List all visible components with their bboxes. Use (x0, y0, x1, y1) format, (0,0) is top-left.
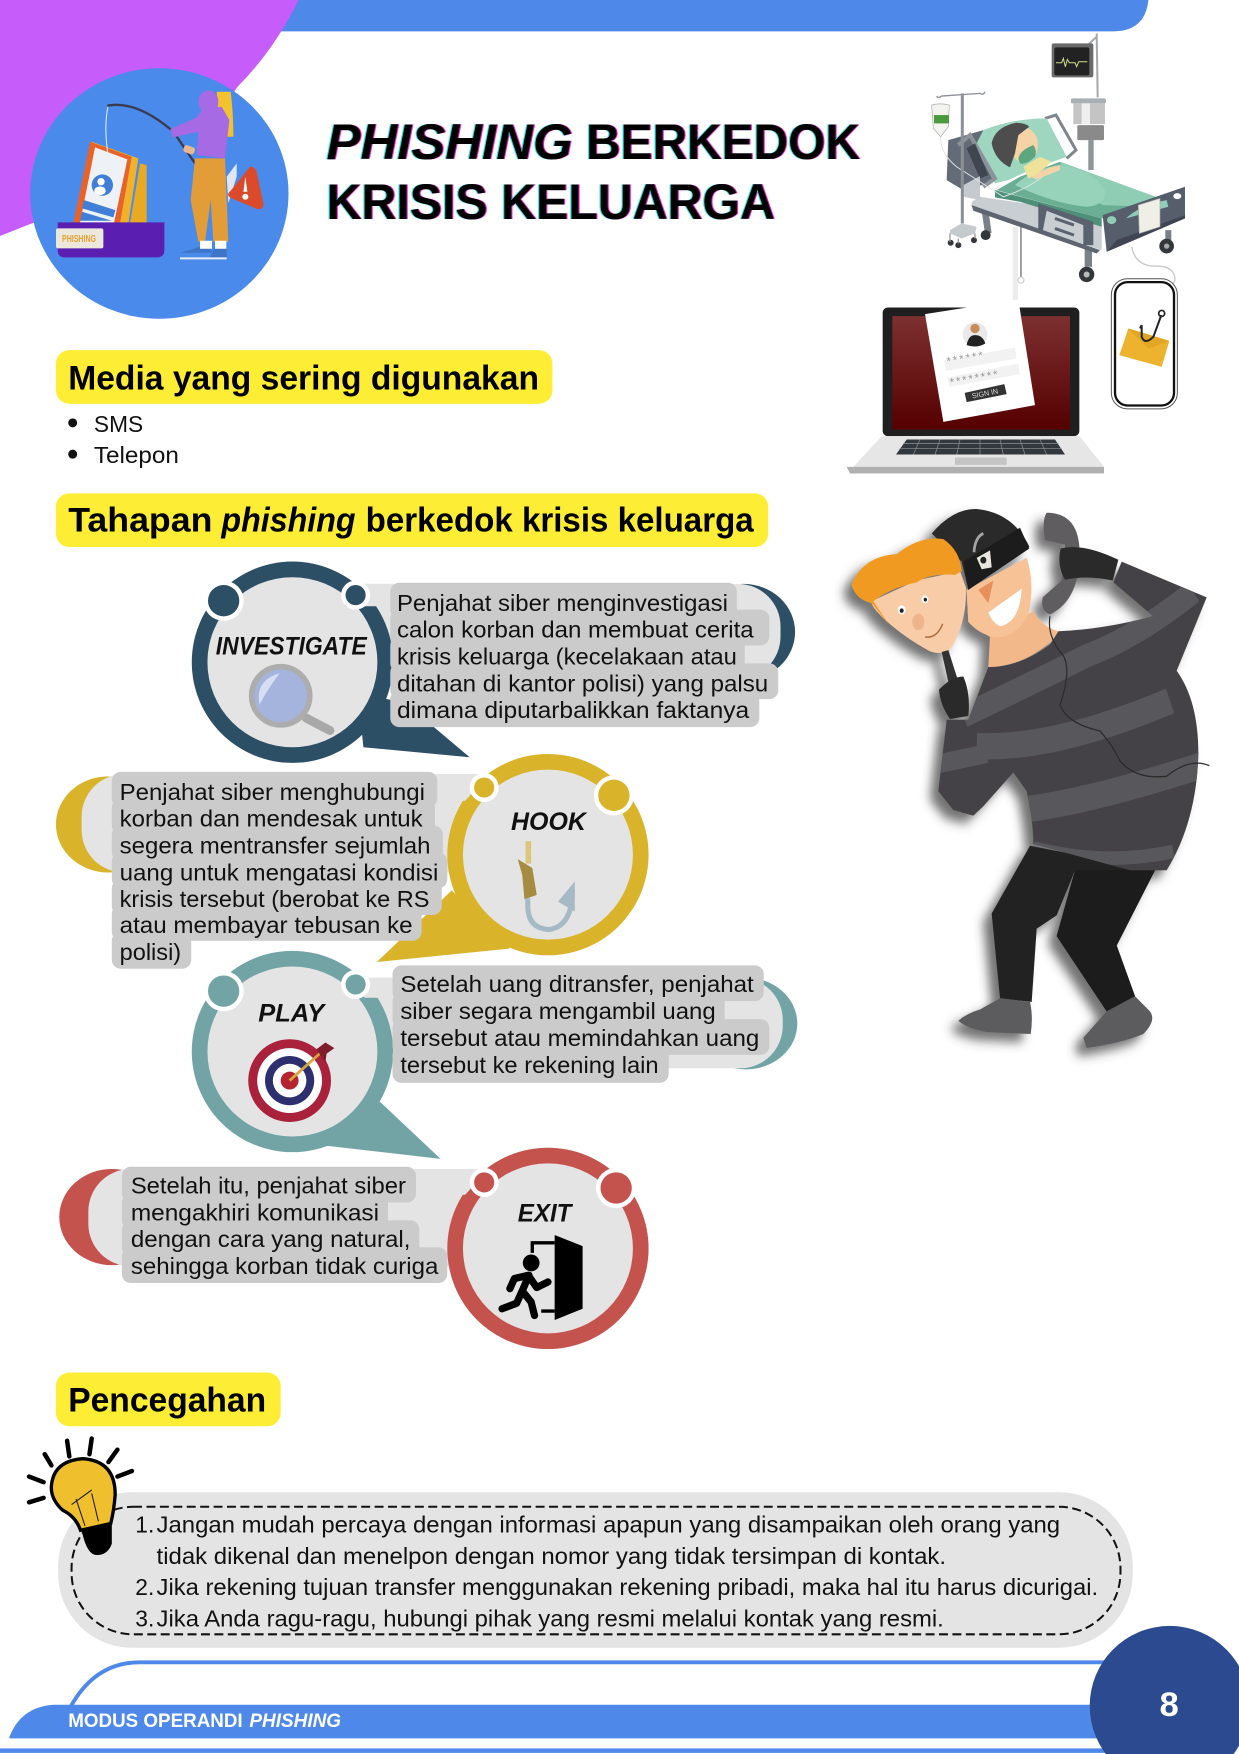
list: media: Telepon (94, 442, 179, 468)
heading: Tahapan phishing: berkedok krisis keluarga (366, 501, 754, 539)
panel: prevention list (58, 1492, 1133, 1648)
text: investigate description: dimana diputarbalikkan faktanya (397, 697, 750, 723)
text: play description: tersebut atau memindahkan uang (400, 1025, 759, 1051)
text: exit description: sehingga korban tidak curiga (131, 1253, 439, 1279)
icon: fishing for account data in blue circle (30, 68, 289, 319)
top blue bar (257, 0, 1148, 31)
illustration: hospital bed, laptop and phone phishing: ****** (946, 350, 985, 368)
step 1: INVESTIGATE (192, 562, 795, 763)
text: investigate description: calon korban dan membuat cerita (397, 617, 755, 643)
panel: prevention list: Jika Anda ragu-ragu, hubungi pihak yang resmi melalui kontak yang resmi. (157, 1605, 944, 1631)
icon: fish hook (518, 841, 575, 930)
icon: fishing for account data in blue circle: PHISHING (62, 234, 96, 245)
panel: prevention list: 2. (135, 1574, 154, 1600)
title: BERKEDOK (586, 113, 860, 170)
label: PLAY: PLAY (258, 1000, 327, 1027)
illustration: thief with mask and phone (852, 509, 1209, 1048)
step 2: HOOK (56, 754, 649, 969)
label: EXIT: EXIT (518, 1201, 573, 1228)
text: hook description: atau membayar tebusan ke (120, 912, 413, 938)
list: media: SMS (94, 411, 143, 437)
text: hook description: krisis tersebut (berobat ke RS (120, 886, 429, 912)
illustration: hospital bed, laptop and phone phishing: ******** (949, 369, 999, 389)
text: exit description (122, 1167, 447, 1283)
text: hook description (112, 772, 447, 969)
heading: Tahapan phishing: phishing (220, 501, 356, 539)
heading: Tahapan phishing (56, 493, 768, 547)
heading: Tahapan phishing: Tahapan (68, 501, 212, 539)
icon: magnifying glass (252, 667, 330, 730)
text: hook description: korban dan mendesak untuk (120, 806, 423, 832)
text: investigate description: krisis keluarga (kecelakaan atau (397, 643, 737, 669)
background: purple corner (0, 0, 299, 236)
panel: prevention list: Jangan mudah percaya dengan informasi apapun yang disampaikan oleh orang yang (157, 1512, 1060, 1538)
text: investigate description: ditahan di kantor polisi) yang palsu (397, 670, 768, 696)
heading: Media yang sering digunakan: Media yang sering digunakan (68, 359, 539, 397)
text: investigate description: Penjahat siber menginvestigasi (397, 590, 728, 616)
icon: target with arrow (248, 1039, 334, 1122)
text: exit description: dengan cara yang natural, (131, 1226, 410, 1252)
heading: Media yang sering digunakan (56, 350, 552, 404)
panel: prevention list: Jika rekening tujuan transfer menggunakan rekening pribadi, maka hal itu harus dicurigai. (157, 1574, 1098, 1600)
text: hook description: uang untuk mengatasi kondisi (120, 859, 438, 885)
title (327, 113, 860, 230)
text: play description: Setelah uang ditransfer, penjahat (400, 971, 754, 997)
illustration: hospital bed, laptop and phone phishing (847, 33, 1185, 474)
text: play description: tersebut ke rekening lain (400, 1052, 659, 1078)
page number badge: 8 (1159, 1686, 1179, 1724)
footer band with section name (0, 1705, 1118, 1753)
illustration: hospital bed, laptop and phone phishing: SIGN IN (971, 387, 999, 400)
text: exit description: Setelah itu, penjahat siber (131, 1173, 406, 1199)
list: media (68, 411, 179, 468)
text: exit description: mengakhiri komunikasi (131, 1199, 379, 1225)
heading: Pencegahan (56, 1373, 281, 1426)
step 4: EXIT (59, 1148, 649, 1349)
text: play description (392, 965, 769, 1083)
footer band with section name: PHISHING (249, 1711, 341, 1732)
title: PHISHING (327, 113, 573, 170)
label: HOOK: HOOK (511, 809, 588, 836)
panel: prevention list: 3. (135, 1605, 154, 1631)
step 3: PLAY (192, 951, 797, 1159)
label: INVESTIGATE: INVESTIGATE (216, 633, 368, 660)
footer band with section name: MODUS OPERANDI (68, 1711, 243, 1732)
text: hook description: polisi) (120, 939, 181, 965)
title: KRISIS KELUARGA (327, 173, 775, 230)
text: investigate description (390, 583, 778, 727)
page number badge (1090, 1626, 1239, 1754)
heading: Pencegahan: Pencegahan (68, 1382, 266, 1420)
text: hook description: segera mentransfer sejumlah (120, 833, 431, 859)
footer arc line (70, 1662, 1107, 1707)
text: hook description: Penjahat siber menghubungi (120, 779, 425, 805)
icon: running person at exit door (502, 1235, 583, 1320)
panel: prevention list: 1. (135, 1512, 154, 1538)
icon: light bulb (29, 1439, 132, 1555)
panel: prevention list: tidak dikenal dan menelpon dengan nomor yang tidak tersimpan di kontak. (157, 1543, 946, 1569)
text: play description: siber segara mengambil uang (400, 998, 716, 1024)
